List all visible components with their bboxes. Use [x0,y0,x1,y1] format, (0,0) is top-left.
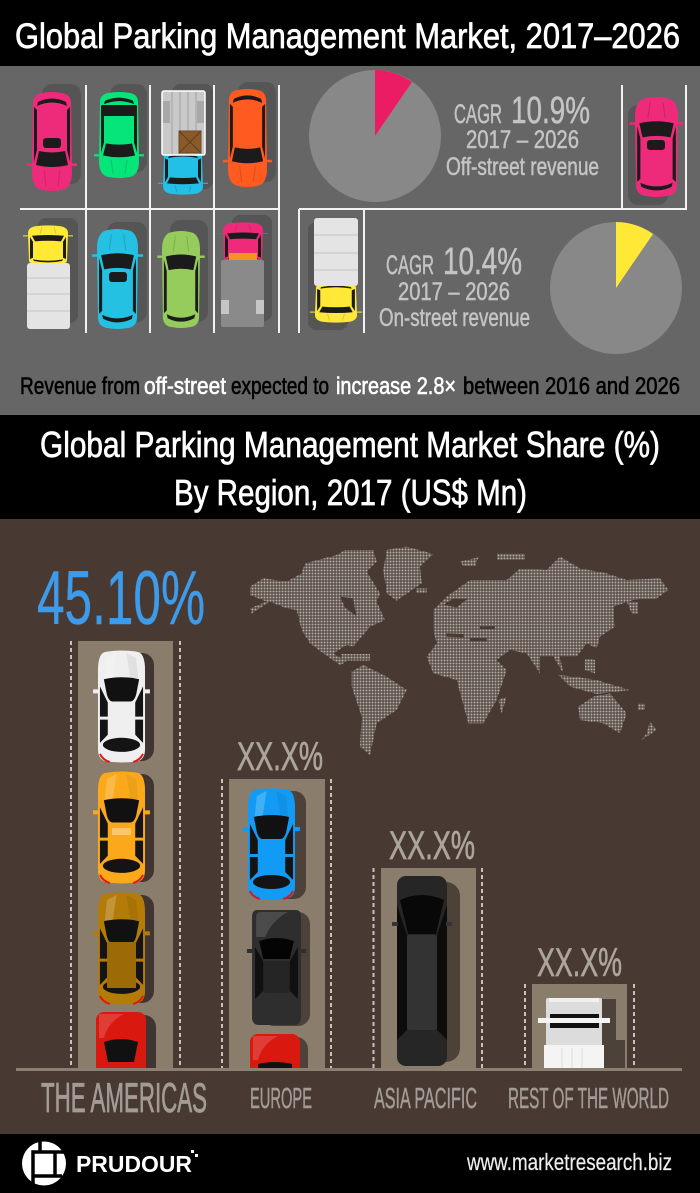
car: taxi [93,772,150,883]
text: on-street CAGR: CAGR [386,250,434,280]
text: off-street CAGR: 2017 – 2026 [466,126,579,154]
text: on-street CAGR: 10.4% [443,241,522,283]
car: pink [27,92,77,191]
shadows [138,653,156,1068]
truck: yellow lower [310,218,362,323]
bar: Rest of the World [525,984,634,1068]
panel: regional share [0,519,700,1134]
car: white [93,651,150,762]
crate [179,131,201,153]
region names [41,1074,669,1121]
bar: Europe [222,779,331,1104]
footer [0,1134,700,1193]
pie: on-street revenue [550,222,682,354]
car: green [94,92,144,178]
revenue statement: increase 2.8× [336,373,456,400]
truck: blue with crate [158,91,208,195]
car: red [96,1012,146,1068]
text: off-street CAGR: Off-street revenue [446,153,599,181]
title bar [0,0,700,66]
limousine [392,876,452,1066]
value: Americas: 45.10% [37,556,205,641]
car: light green [157,231,205,328]
shadow [410,882,460,1062]
revenue statement: off-street [144,373,226,400]
truck: yellow [23,225,73,329]
wordmark: PRUDOUR [76,1151,192,1177]
value: Asia Pacific: XX.X% [389,824,475,868]
car: black [247,910,306,1025]
pie: off-street revenue [309,70,441,202]
text: on-street CAGR: 2017 – 2026 [398,278,510,306]
revenue statement: expected to [231,373,329,400]
world map [250,547,668,755]
bar: The Americas [71,641,180,1123]
shadow [602,999,625,1068]
text: on-street CAGR: On-street revenue [379,304,530,332]
text: on-street CAGR [379,241,530,332]
car: cyan [92,229,143,329]
region names: EUROPE [250,1083,312,1115]
car: blue [243,788,300,900]
text: off-street CAGR: CAGR [454,99,502,129]
revenue statement: Revenue from [20,373,140,400]
text: off-street CAGR: 10.9% [511,90,590,132]
parking lines [20,85,687,333]
car shadows [38,82,668,330]
truck: white [538,998,610,1068]
logo [22,1141,198,1186]
baseline [16,1068,682,1071]
bar: Asia Pacific [374,868,482,1068]
value: Rest of the World: XX.X% [537,941,622,985]
car: pink right [630,97,683,197]
shadows [270,791,310,1068]
section heading bar [0,415,700,519]
region names: THE AMERICAS [41,1074,207,1121]
revenue statement [20,373,680,400]
value labels [37,556,622,985]
text: off-street CAGR [446,90,599,181]
section heading [40,424,660,513]
value: Europe: XX.X% [237,735,323,779]
car: red [250,1034,300,1068]
panel: parking lot [0,66,700,415]
car: orange [223,89,272,187]
car: pickup [93,893,150,1004]
section heading: By Region, 2017 (US$ Mn) [174,472,527,513]
region names: ASIA PACIFIC [374,1083,477,1115]
truck: pink with grey bed [218,222,268,327]
